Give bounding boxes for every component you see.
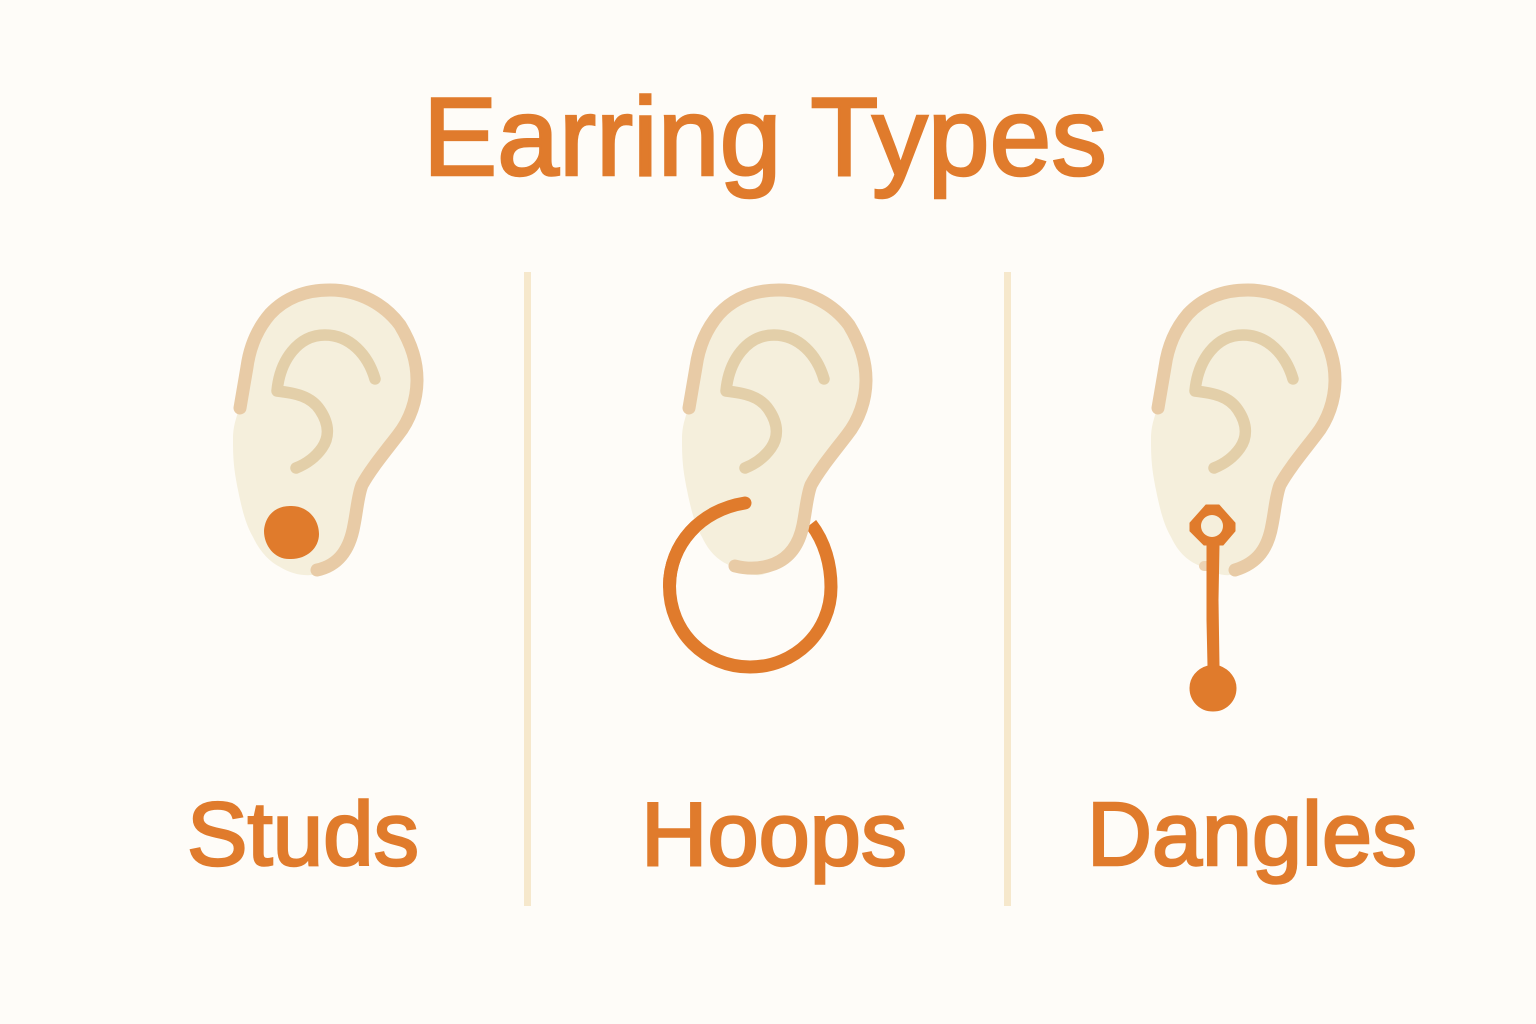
icon: dangle earring — [1190, 505, 1236, 711]
icon: hoop front arc — [670, 503, 745, 586]
label: dangles: Dangles — [1087, 785, 1417, 885]
panel: dangles — [1087, 290, 1417, 885]
label: hoops: Hoops — [641, 785, 907, 885]
panel: hoops — [641, 290, 907, 885]
icon: hoop back arc — [670, 503, 831, 667]
icon: ear (hoops) — [682, 290, 866, 575]
label: studs: Studs — [187, 785, 419, 885]
panel: studs — [187, 290, 419, 885]
icon: stud earring — [264, 506, 319, 559]
icon: ear (dangles) — [1151, 290, 1335, 575]
title: Earring Types — [423, 75, 1107, 199]
icon: ear (studs) — [233, 290, 417, 575]
